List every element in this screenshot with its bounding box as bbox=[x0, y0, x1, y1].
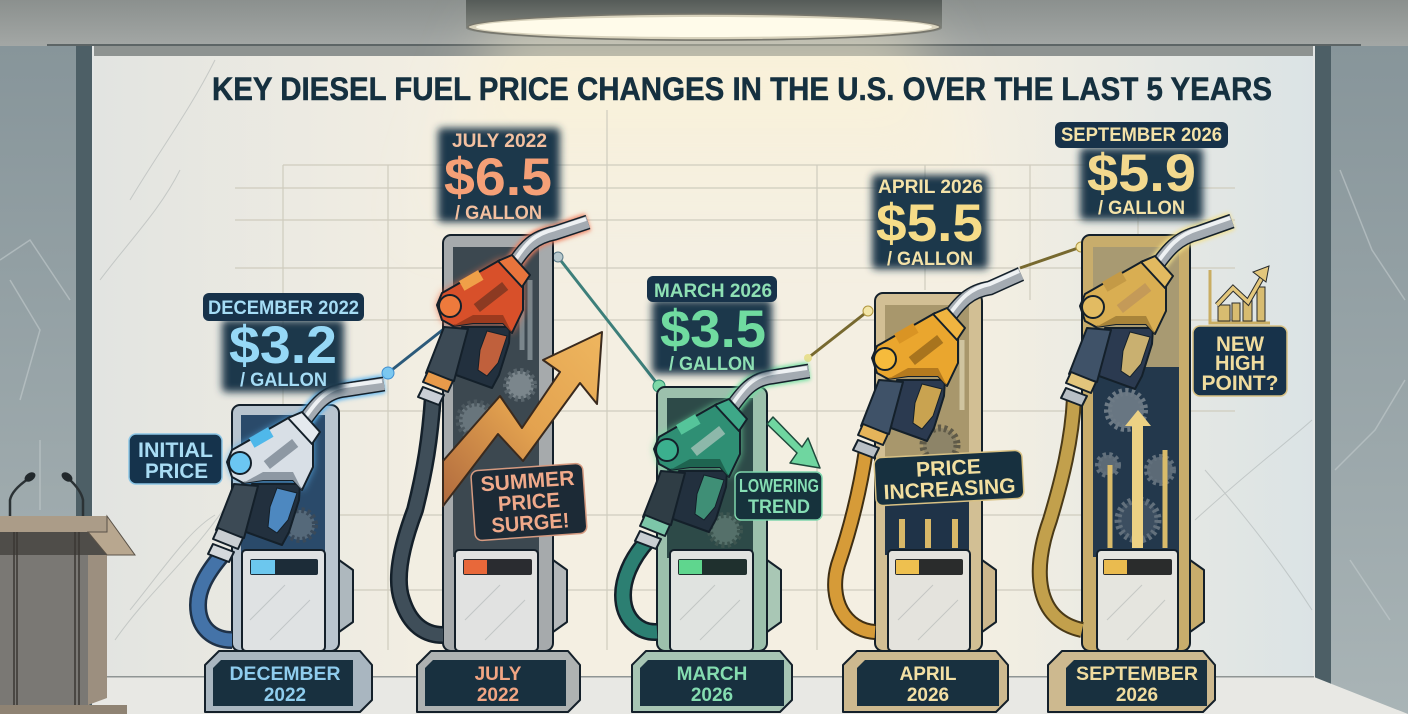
callout: new high point: NEW bbox=[1216, 333, 1264, 356]
display panel bbox=[670, 550, 753, 651]
price tag: July 2022: JULY 2022 bbox=[452, 131, 547, 152]
price tag: September 2026: / GALLON bbox=[1098, 198, 1185, 219]
cabinet bbox=[443, 235, 553, 651]
ceiling bbox=[0, 0, 1408, 46]
display panel bbox=[1097, 550, 1178, 651]
nozzle spout bbox=[1153, 218, 1232, 271]
nozzle spout bbox=[945, 271, 1021, 323]
hose bbox=[623, 540, 657, 632]
connecting trend line: Dec 2022 to Jul 2022 bbox=[382, 328, 445, 379]
nozzle head bbox=[418, 255, 530, 405]
pump 2: July 2022: JULY bbox=[475, 664, 522, 685]
price tag: December 2022: / GALLON bbox=[240, 370, 327, 391]
price tag: April 2026: $5.5 bbox=[876, 194, 983, 253]
price tag: March 2026: / GALLON bbox=[669, 354, 755, 375]
callout: initial price: PRICE bbox=[145, 460, 208, 483]
base bbox=[843, 651, 1008, 712]
podium with microphones bbox=[0, 470, 135, 714]
callout: summer price surge: SURGE! bbox=[491, 509, 570, 538]
pump 2: July 2022: 2022 bbox=[477, 685, 519, 706]
callout: lowering trend bbox=[735, 472, 822, 520]
connecting trend line: Mar 2026 to Apr 2026 bbox=[804, 306, 873, 362]
rising arrow and bars bbox=[1125, 410, 1151, 548]
pump 1: December 2022: 2022 bbox=[264, 685, 306, 706]
nozzle spout bbox=[510, 219, 588, 270]
callout: summer price surge: PRICE bbox=[497, 489, 561, 516]
callout: lowering trend: LOWERING bbox=[739, 476, 819, 496]
callout: price increasing: PRICE bbox=[915, 455, 982, 482]
price tag: July 2022 bbox=[438, 128, 560, 224]
callout: new high point: POINT? bbox=[1202, 372, 1278, 395]
callout: initial price bbox=[129, 434, 222, 484]
price tag: April 2026: / GALLON bbox=[887, 249, 973, 270]
hose bbox=[1040, 398, 1082, 630]
nozzle head bbox=[853, 308, 965, 458]
connecting trend line: Jul 2022 to Mar 2026 bbox=[553, 252, 665, 392]
price tag: July 2022: $6.5 bbox=[444, 148, 552, 207]
hose bbox=[399, 395, 443, 635]
callout: initial price: INITIAL bbox=[138, 439, 213, 462]
nozzle spout bbox=[300, 381, 384, 427]
hose bbox=[835, 450, 875, 632]
price tag: September 2026 bbox=[1055, 122, 1228, 220]
price tag: July 2022: / GALLON bbox=[455, 203, 542, 224]
callout: price increasing bbox=[874, 450, 1024, 506]
price tag: December 2022: DECEMBER 2022 bbox=[208, 298, 359, 319]
price tag: April 2026: APRIL 2026 bbox=[878, 177, 983, 198]
price tag: December 2022: $3.2 bbox=[229, 316, 337, 375]
base bbox=[1048, 651, 1215, 712]
arrow: lowering trend bbox=[767, 417, 820, 468]
pump 2: July 2022 bbox=[399, 219, 588, 712]
display panel bbox=[242, 550, 325, 651]
wall bbox=[94, 56, 1314, 714]
arrow: summer surge zigzag bbox=[443, 332, 602, 506]
hose bbox=[198, 555, 232, 640]
display panel bbox=[455, 550, 538, 651]
title: KEY DIESEL FUEL PRICE CHANGES IN THE U.S. OVER THE LAST 5 YEARS bbox=[212, 71, 1272, 107]
callout: summer price surge bbox=[471, 463, 587, 541]
nozzle head bbox=[1061, 256, 1173, 406]
ceiling lamp bbox=[466, 0, 942, 41]
pump 3: March 2026: MARCH bbox=[677, 664, 747, 685]
cabinet bbox=[1082, 235, 1190, 651]
pump 3: March 2026: 2026 bbox=[691, 685, 733, 706]
floor bbox=[94, 677, 1408, 714]
price tag: March 2026: $3.5 bbox=[660, 300, 766, 359]
pump 1: December 2022 bbox=[198, 381, 384, 712]
pump 4: April 2026 bbox=[835, 271, 1021, 712]
callout: lowering trend: TREND bbox=[748, 497, 810, 518]
nozzle head bbox=[208, 412, 320, 562]
cabinet bbox=[875, 293, 982, 651]
nozzle spout bbox=[727, 368, 809, 414]
price tag: April 2026 bbox=[872, 175, 988, 270]
base bbox=[632, 651, 792, 712]
cabinet bbox=[232, 405, 339, 651]
callout: new high point bbox=[1193, 326, 1287, 396]
cabinet bbox=[657, 387, 767, 651]
pump 1: December 2022: DECEMBER bbox=[230, 664, 341, 685]
pump 4: April 2026: 2026 bbox=[907, 685, 949, 706]
pump 5: September 2026 bbox=[1040, 218, 1232, 712]
right marble side panel bbox=[1331, 46, 1408, 714]
nozzle head bbox=[635, 399, 747, 549]
callout: price increasing: INCREASING bbox=[883, 475, 1016, 504]
left marble side panel bbox=[0, 46, 76, 714]
light glow from lamp bbox=[410, 30, 1000, 240]
pump 4: April 2026: APRIL bbox=[900, 664, 957, 685]
base bbox=[205, 651, 372, 712]
price tag: September 2026: SEPTEMBER 2026 bbox=[1061, 125, 1222, 146]
base bbox=[417, 651, 580, 712]
pump 5: September 2026: 2026 bbox=[1116, 685, 1158, 706]
pump 3: March 2026 bbox=[623, 368, 809, 712]
display panel bbox=[888, 550, 970, 651]
price tag: March 2026 bbox=[647, 276, 777, 375]
price tag: December 2022 bbox=[203, 293, 364, 392]
pump 5: September 2026: SEPTEMBER bbox=[1076, 664, 1198, 685]
price tag: September 2026: $5.9 bbox=[1087, 144, 1196, 203]
callout: new high point: HIGH bbox=[1215, 352, 1265, 375]
callout: summer price surge: SUMMER bbox=[480, 467, 575, 496]
connecting trend line: Apr 2026 to Sep 2026 bbox=[1020, 242, 1086, 268]
icon: rising bar chart bbox=[1210, 266, 1270, 323]
price tag: March 2026: MARCH 2026 bbox=[654, 281, 772, 302]
